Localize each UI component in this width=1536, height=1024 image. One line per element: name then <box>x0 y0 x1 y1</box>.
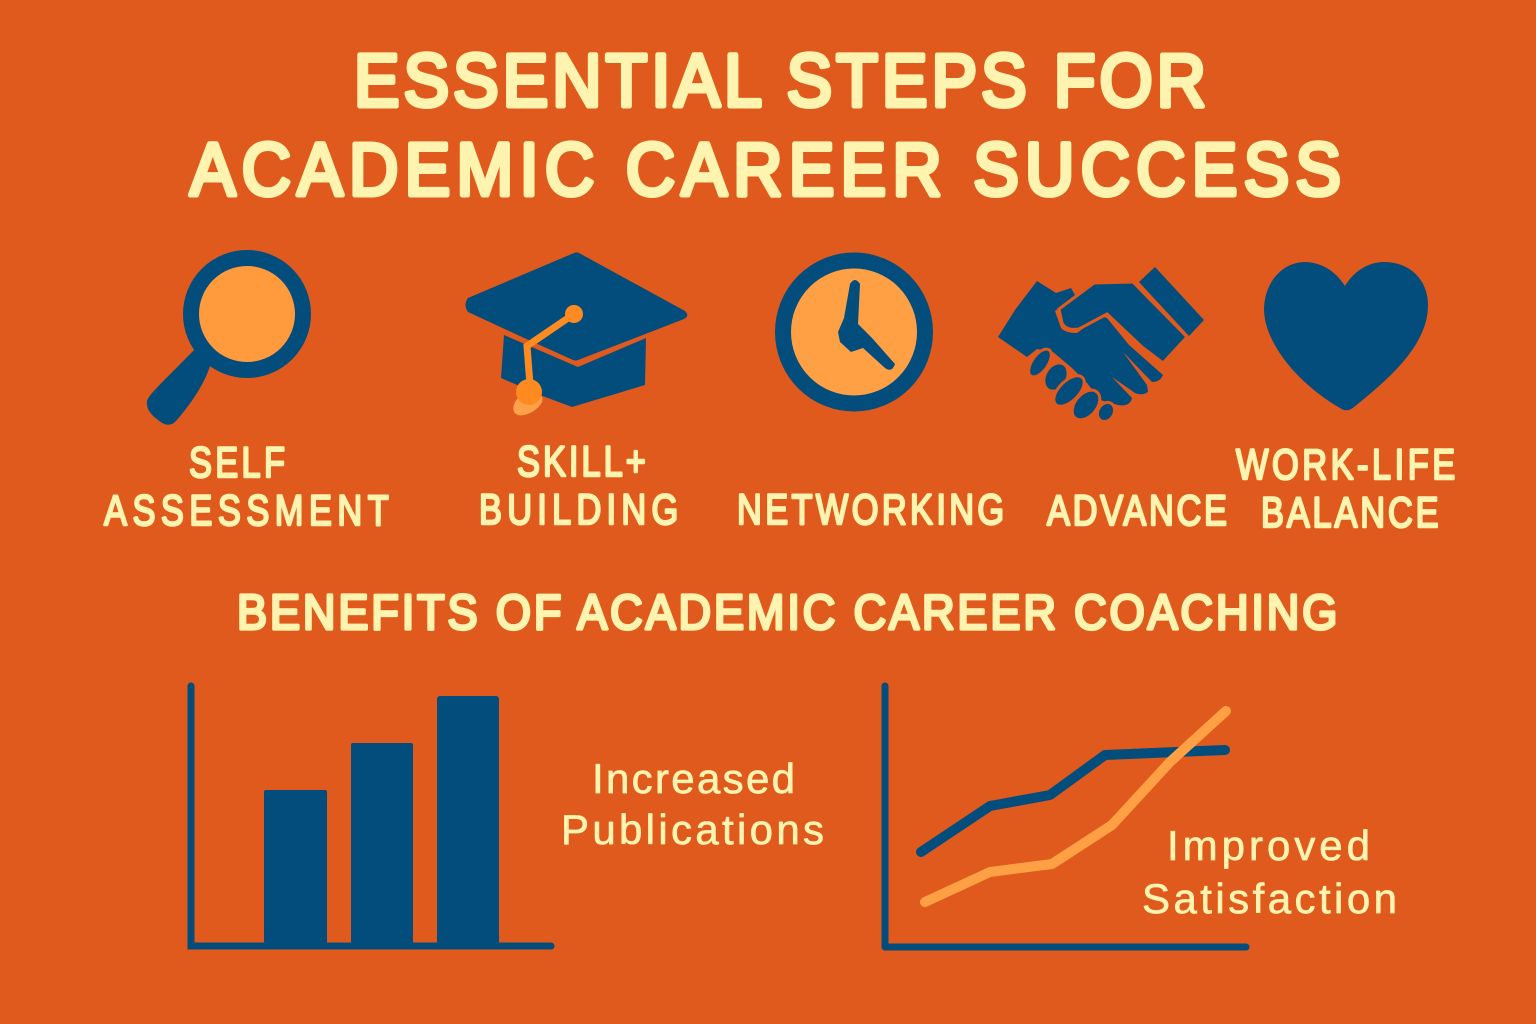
text: improved satisfaction: Satisfaction <box>1142 875 1397 922</box>
icon: handshake <box>998 267 1204 425</box>
label: self assessment: ASSESSMENT <box>104 487 389 535</box>
heading: benefits: BENEFITS OF ACADEMIC CAREER COACHING <box>237 584 1337 639</box>
line chart: improved satisfaction <box>885 686 1246 947</box>
label: self assessment: SELF <box>189 439 285 487</box>
bar chart: increased publications <box>191 686 551 946</box>
text: improved satisfaction <box>1142 822 1397 922</box>
label: skill building: BUILDING <box>479 486 678 534</box>
title: ESSENTIAL STEPS FOR <box>354 40 1206 123</box>
text: improved satisfaction: Improved <box>1167 822 1370 869</box>
icon: heart <box>1264 262 1428 410</box>
label: skill building <box>479 438 678 534</box>
icon: clock <box>783 260 925 404</box>
label: networking: NETWORKING <box>737 486 1004 534</box>
label: self assessment <box>104 439 389 535</box>
text: increased publications <box>561 755 824 853</box>
label: work-life balance: BALANCE <box>1261 489 1439 537</box>
label: work-life balance: WORK-LIFE <box>1236 441 1455 489</box>
icon: graduation cap <box>466 252 687 415</box>
text: increased publications: Publications <box>561 806 824 853</box>
label: skill building: SKILL+ <box>517 438 646 486</box>
title: ACADEMIC CAREER SUCCESS <box>190 129 1341 212</box>
icon: magnifying glass <box>147 258 303 425</box>
label: advance: ADVANCE <box>1047 487 1227 535</box>
label: work-life balance <box>1236 441 1455 537</box>
text: increased publications: Increased <box>592 755 795 802</box>
title <box>190 40 1341 212</box>
